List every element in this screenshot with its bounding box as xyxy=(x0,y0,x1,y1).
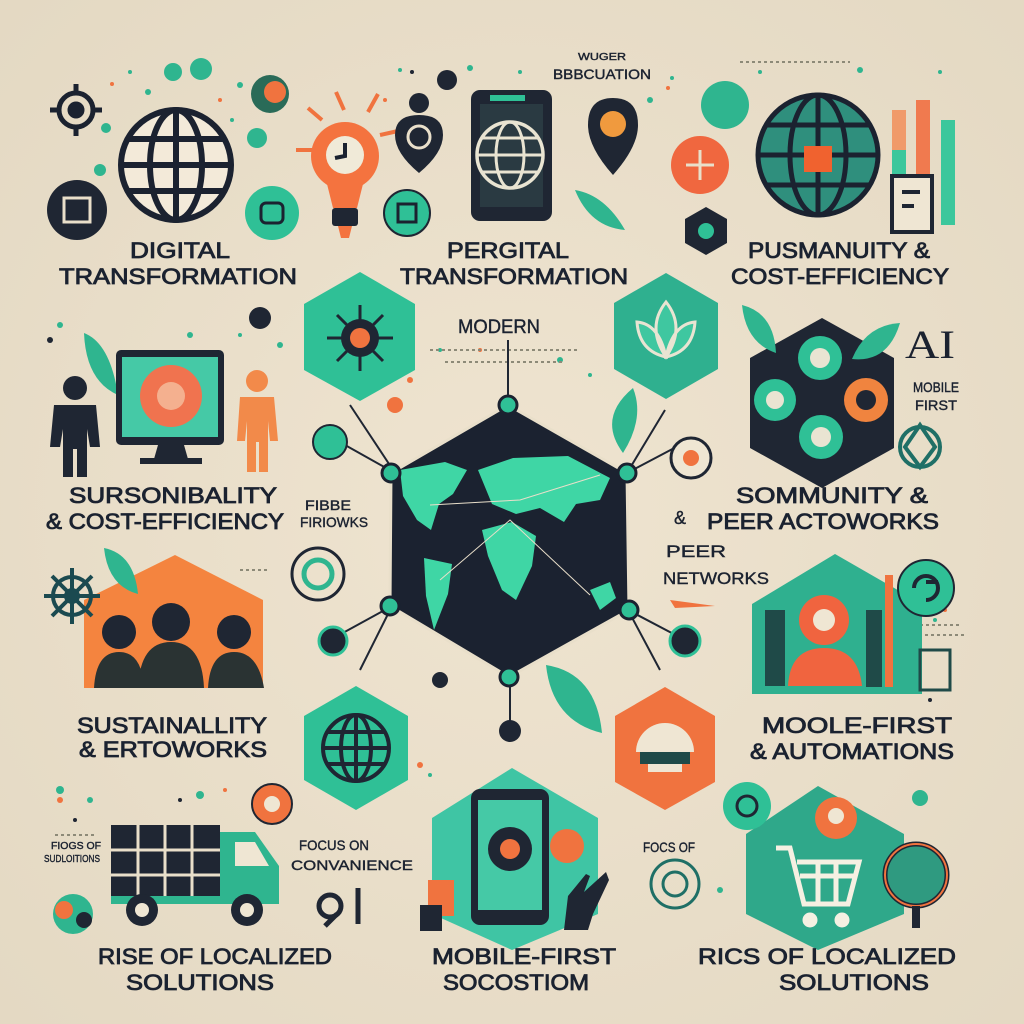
label: focus on convenience xyxy=(291,837,413,873)
small label: peer networks: & xyxy=(674,508,686,528)
label: AI mobile first: MOBILE xyxy=(913,379,959,395)
heading: TRANSFORMATION xyxy=(400,264,628,289)
label: focus on convenience: CONVANIENCE xyxy=(291,857,413,873)
panel: mobile first ecosystem xyxy=(420,768,616,995)
icon: location pin xyxy=(588,98,638,175)
icon: teal disc xyxy=(723,782,771,830)
icon: shopping cart xyxy=(776,848,859,925)
icon: hexagon leaf xyxy=(614,273,718,399)
panel: people with monitor left xyxy=(46,333,284,534)
icon: magnifier xyxy=(885,844,947,928)
small text block: FIOGS OF xyxy=(51,841,101,852)
connector nodes xyxy=(381,396,638,686)
icon: dark pin xyxy=(395,93,443,173)
heading xyxy=(432,944,616,995)
label: AI mobile first xyxy=(905,322,959,413)
small label: WUGER xyxy=(578,52,626,63)
icon: orange pin xyxy=(815,797,857,839)
heading xyxy=(400,238,628,289)
heading: & ERTOWORKS xyxy=(79,737,267,762)
heading: SUSTAINALLITY xyxy=(77,713,267,738)
panel: community peer right xyxy=(707,305,959,534)
icon: orange disc xyxy=(671,136,729,194)
satellite node discs xyxy=(313,425,711,742)
icon: teal hexagon person xyxy=(752,554,922,694)
icon: orange node xyxy=(550,829,584,863)
label: focs of: FOCS OF xyxy=(643,839,695,855)
icon: colored cluster xyxy=(53,894,93,934)
label: AI mobile first: FIRST xyxy=(915,397,957,413)
small label xyxy=(553,52,651,82)
icon: smartphone globe xyxy=(471,90,552,221)
panel: rics of localized solutions xyxy=(643,782,956,995)
icon: teal badge xyxy=(245,186,299,240)
panel: digital transformation top left xyxy=(47,58,299,289)
heading: COST-EFFICIENCY xyxy=(731,264,949,289)
label: AI mobile first: AI xyxy=(905,322,955,367)
icon: light bulb xyxy=(296,92,398,238)
heading xyxy=(707,483,939,534)
icon: smartphone xyxy=(471,789,549,925)
connector lines xyxy=(330,340,685,730)
icon: dark badge xyxy=(47,180,107,240)
world map xyxy=(400,456,616,630)
icon: teal ring xyxy=(900,425,940,467)
icon: hexagon globe lower xyxy=(304,686,408,810)
icon: dark hexagon cluster xyxy=(750,318,894,488)
heading: RICS OF LOCALIZED xyxy=(698,944,956,969)
heading: SOCOSTIOM xyxy=(443,970,589,995)
small label: fibre networks xyxy=(300,497,368,530)
icon: leaf xyxy=(575,190,625,230)
small label: peer networks xyxy=(663,508,769,588)
icon: teal ring badge xyxy=(898,560,954,616)
panel: cost efficiency top right xyxy=(671,81,955,289)
heading: PUSMANUITY & xyxy=(748,238,930,263)
icon: truck xyxy=(111,825,279,926)
icon: teal hexagon xyxy=(746,786,904,950)
heading xyxy=(698,944,956,995)
small text block: SUDLOITIONS xyxy=(44,854,100,865)
icon: person dark xyxy=(50,376,100,477)
scattered specks xyxy=(47,62,965,893)
hexagon xyxy=(390,405,629,677)
icon: hand xyxy=(564,872,609,930)
small label: fibre networks: FIRIOWKS xyxy=(300,514,368,530)
icon: hexagon orange sun xyxy=(615,687,715,810)
heading: modern: MODERN xyxy=(458,317,540,338)
icon: leaf xyxy=(104,548,138,594)
icon: person orange xyxy=(237,370,278,472)
panel: rise of localized solutions truck xyxy=(44,784,413,995)
icon: leaf lower xyxy=(546,665,602,733)
heading: DIGITAL xyxy=(130,238,230,263)
small text block xyxy=(44,841,101,865)
icon: leaf xyxy=(84,333,118,395)
icon: gear node xyxy=(50,84,102,136)
icon: ship wheel xyxy=(44,568,100,624)
small label: peer networks: NETWORKS xyxy=(663,569,769,588)
icon: leaves xyxy=(742,305,900,359)
bar chart xyxy=(892,100,955,225)
network lines on map xyxy=(430,475,600,595)
panel: pergital transformation top middle xyxy=(296,52,651,289)
panel: community group left xyxy=(44,548,344,762)
heading xyxy=(731,238,949,289)
icon: small dots xyxy=(94,58,267,176)
icon: leaf center right xyxy=(612,388,637,453)
icon: hexagon sun xyxy=(304,272,415,401)
heading: SOMMUNITY & xyxy=(736,483,928,508)
heading: SOLUTIONS xyxy=(779,970,929,995)
heading: PERGITAL xyxy=(447,238,569,263)
heading xyxy=(77,713,267,762)
icon: monitor xyxy=(116,350,224,464)
icon: ring badge xyxy=(292,548,344,600)
icon: globe xyxy=(120,109,232,221)
icon: teal hexagon xyxy=(432,768,598,950)
heading: TRANSFORMATION xyxy=(59,264,297,289)
heading xyxy=(59,238,297,289)
heading: RISE OF LOCALIZED xyxy=(98,944,332,969)
heading: MOOLE-FIRST xyxy=(762,713,952,738)
panel: mobile first automations right xyxy=(750,554,954,764)
small label: fibre networks: FIBBE xyxy=(305,497,351,513)
icon: scribble circle xyxy=(651,860,699,908)
heading: MOBILE-FIRST xyxy=(432,944,616,969)
heading: PEER ACTOWORKS xyxy=(707,509,939,534)
small label: peer networks: PEER xyxy=(666,542,726,561)
heading xyxy=(46,483,284,534)
icon: teal circle badge xyxy=(384,190,430,236)
panel: central hexagon map xyxy=(313,317,711,742)
icon: small frame xyxy=(920,650,950,690)
icon: orange hexagon group xyxy=(84,555,264,688)
icon: globe with orange center xyxy=(758,95,878,215)
heading: SURSONIBALITY xyxy=(69,483,277,508)
icon: orange and green badge xyxy=(251,75,289,113)
icon: small widget xyxy=(420,880,454,931)
icon: dark hex xyxy=(685,207,727,255)
icon: search xyxy=(319,888,358,926)
icon: document frame xyxy=(892,176,932,232)
icon: orange badge xyxy=(252,784,292,824)
heading: SOLUTIONS xyxy=(126,970,274,995)
heading: & COST-EFFICIENCY xyxy=(46,509,284,534)
heading xyxy=(750,713,954,764)
heading xyxy=(98,944,332,995)
small label: BBBCUATION xyxy=(553,66,651,82)
icon: teal disc xyxy=(701,81,749,129)
heading: & AUTOMATIONS xyxy=(750,739,954,764)
label: focus on convenience: FOCUS ON xyxy=(299,837,369,853)
